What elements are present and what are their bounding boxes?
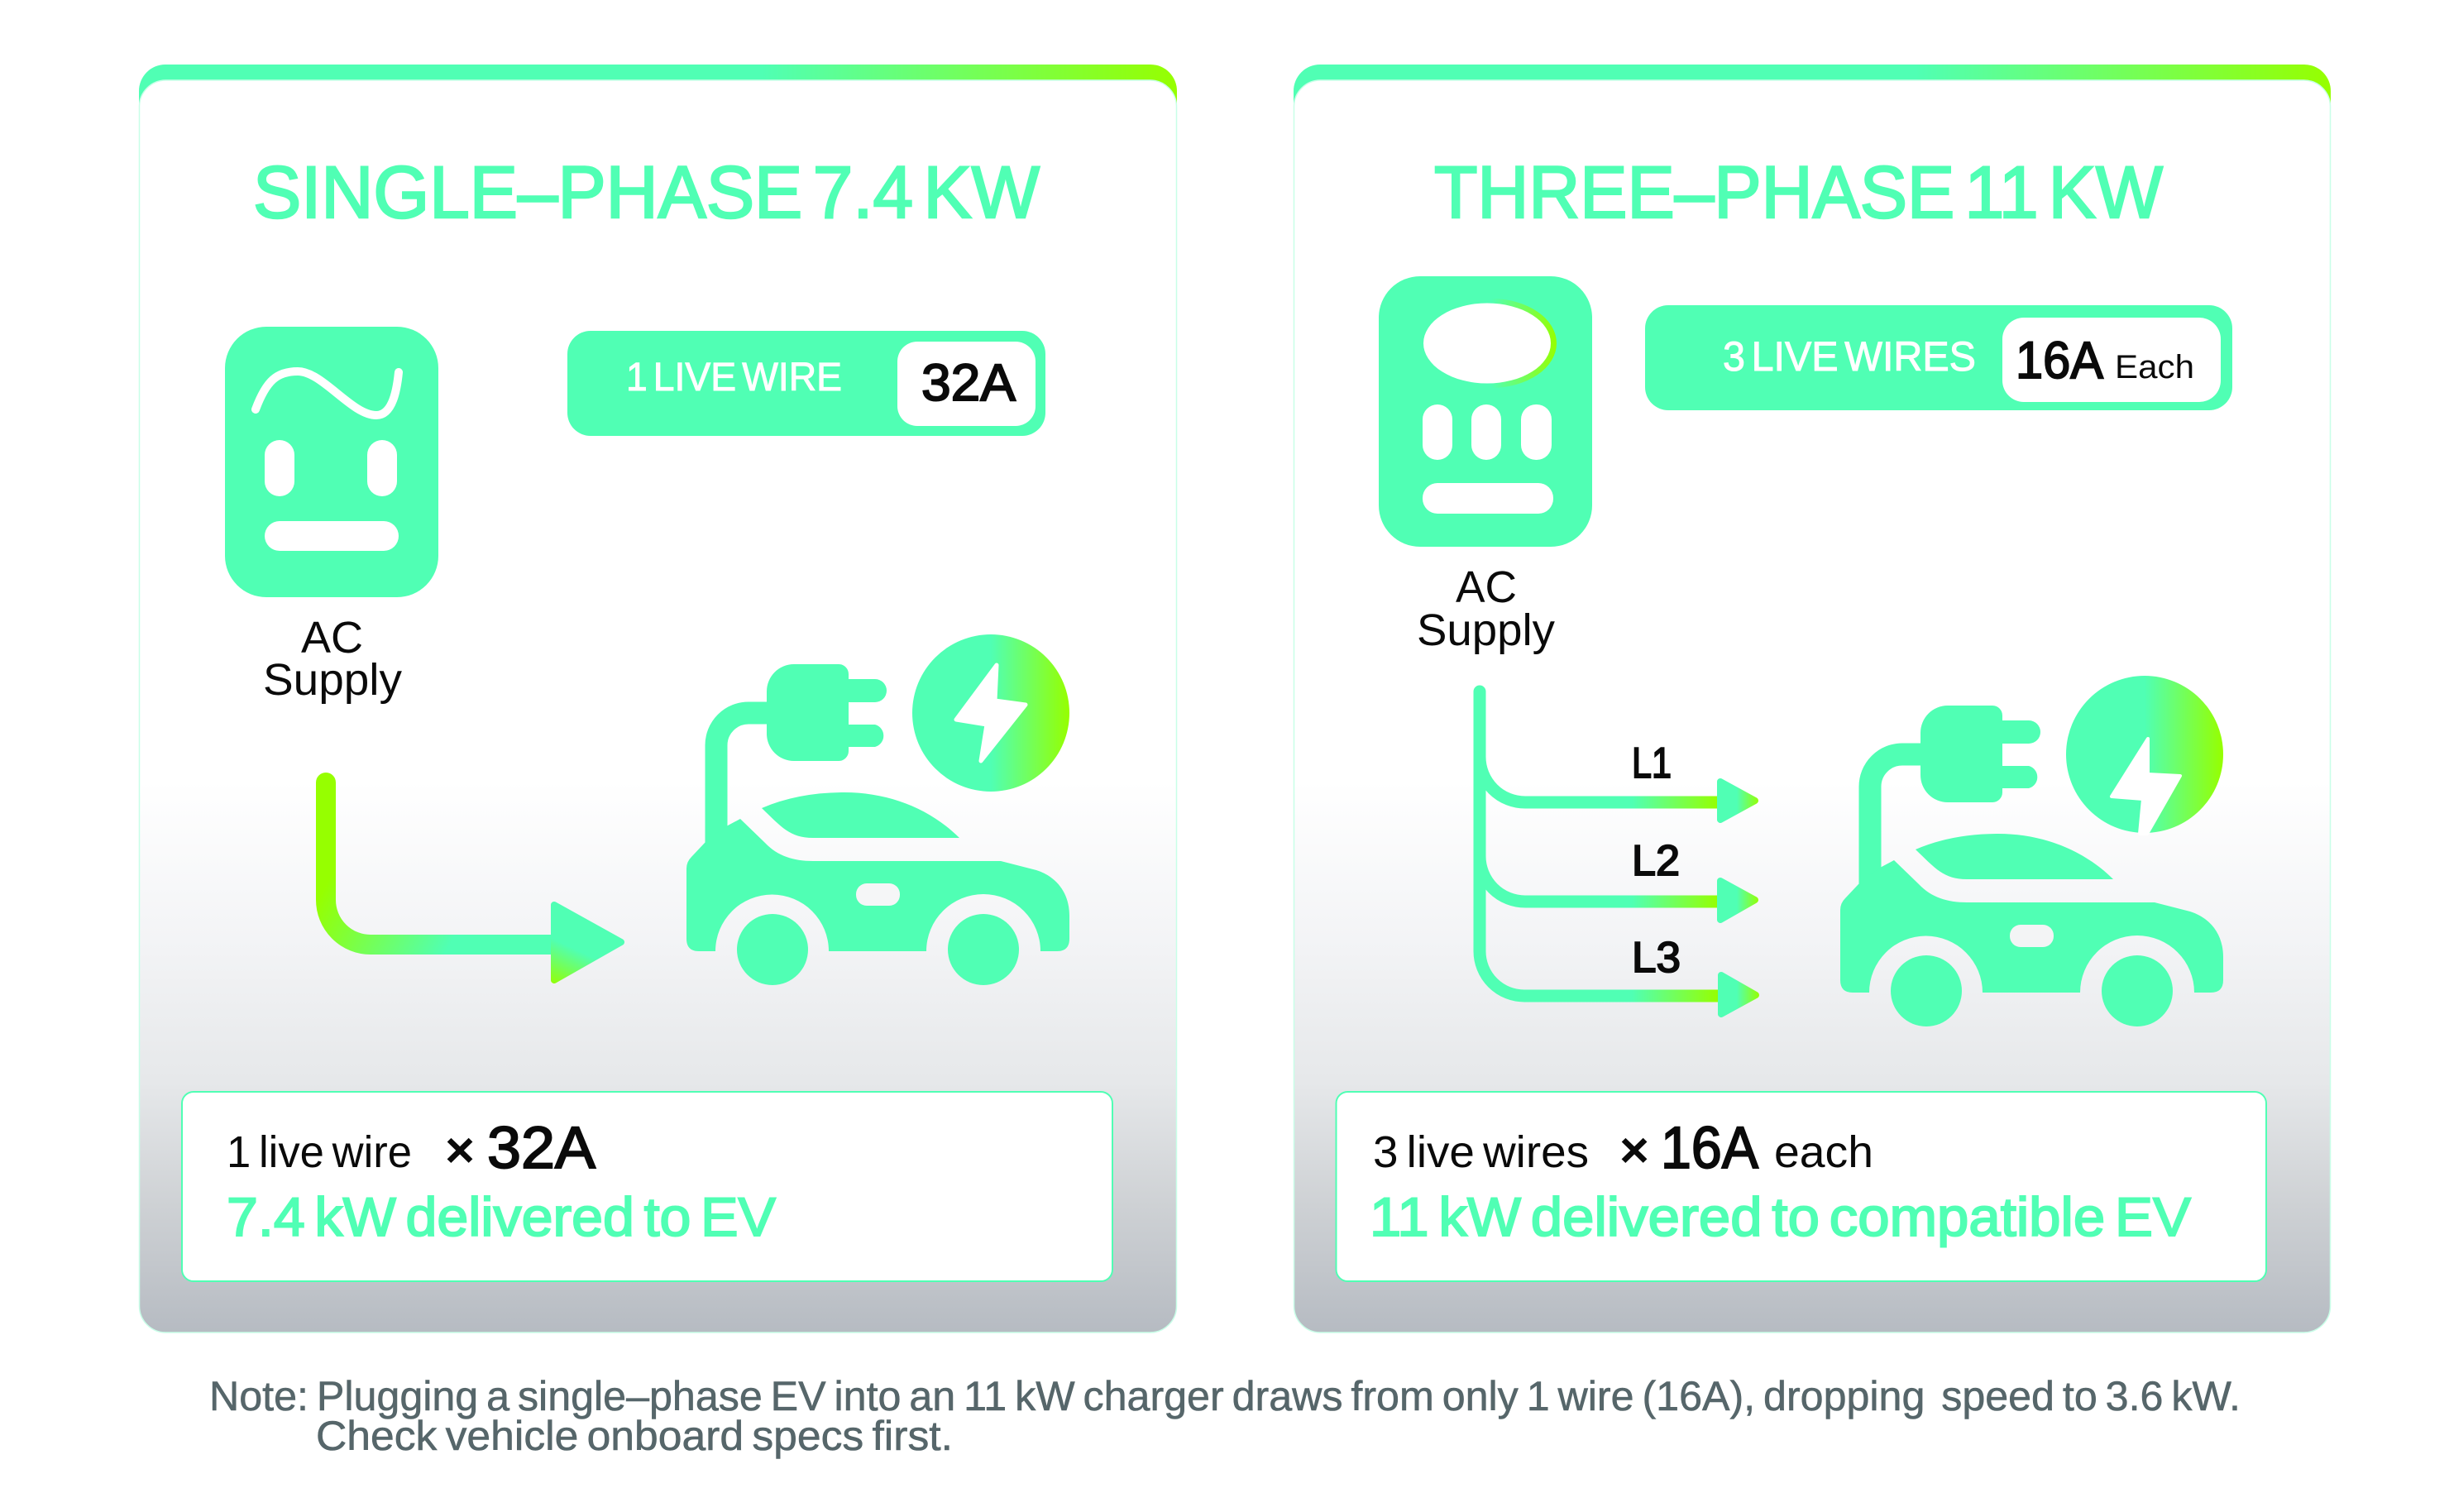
label: AC supply bbox=[1417, 562, 1555, 655]
summary box: single-phase: 1 live wire bbox=[227, 1127, 412, 1177]
summary box: three-phase: 11 kW delivered to compatible EV bbox=[1370, 1186, 2191, 1247]
heading: three-phase: THREE–PHASE 11 KW bbox=[1434, 151, 2163, 233]
diagram: L1 L2 L3 wires bbox=[1480, 691, 1756, 1014]
icon: EV with plug and charge badge bbox=[686, 634, 1069, 985]
summary box: single-phase: 32A bbox=[487, 1116, 596, 1181]
summary box: single-phase bbox=[182, 1092, 1112, 1281]
summary box: three-phase: × bbox=[1619, 1122, 1649, 1178]
pill: 3 live wires 16A each: 3 LIVE WIRES bbox=[1723, 333, 1976, 380]
diagram: L1 L2 L3 wires: L1 bbox=[1632, 739, 1672, 787]
panel background bbox=[139, 80, 1176, 1333]
footnote: Check vehicle onboard specs first. bbox=[316, 1413, 953, 1459]
pill: 3 live wires 16A each bbox=[1645, 305, 2232, 410]
pill: 3 live wires 16A each: 16A bbox=[2016, 332, 2103, 390]
panel background bbox=[1294, 80, 2331, 1333]
label: AC supply: Supply bbox=[263, 655, 402, 705]
icon: EV with plug and charge badge bbox=[1840, 676, 2223, 1026]
diagram: L1 L2 L3 wires: L3 bbox=[1632, 934, 1681, 982]
summary box: three-phase: 16A bbox=[1661, 1116, 1759, 1181]
summary box: three-phase: 3 live wires bbox=[1373, 1127, 1589, 1177]
label: AC supply bbox=[263, 613, 402, 705]
summary box: three-phase bbox=[1337, 1092, 2266, 1281]
label: AC supply: Supply bbox=[1417, 605, 1555, 655]
icon: single-phase socket bbox=[225, 327, 438, 597]
footnote: Note: Plugging a single–phase EV into an 11 kW charger draws from only 1 wire (16A), dropping speed to 3.6 kW. bbox=[209, 1373, 2241, 1419]
diagram: L1 L2 L3 wires: L2 bbox=[1632, 837, 1680, 885]
footnote bbox=[209, 1373, 2241, 1459]
summary box: three-phase: each bbox=[1774, 1127, 1873, 1177]
pill: 1 live wire 32A: 1 LIVE WIRE bbox=[626, 356, 842, 400]
label: AC supply: AC bbox=[1456, 562, 1517, 612]
icon: three-phase socket bbox=[1379, 276, 1592, 547]
summary box: single-phase: × bbox=[445, 1122, 475, 1178]
panel top accent band bbox=[1294, 65, 2331, 139]
summary box: single-phase: 7.4 kW delivered to EV bbox=[227, 1186, 776, 1247]
panel: three-phase bbox=[1294, 65, 2331, 1333]
panel: single-phase bbox=[139, 65, 1177, 1333]
heading: single-phase: SINGLE–PHASE 7.4 KW bbox=[253, 151, 1040, 233]
pill: 3 live wires 16A each: Each bbox=[2115, 349, 2194, 385]
pill: 1 live wire 32A bbox=[567, 331, 1045, 436]
label: AC supply: AC bbox=[301, 613, 363, 663]
panel top accent band bbox=[139, 65, 1177, 139]
pill: 1 live wire 32A: 32A bbox=[921, 354, 1016, 412]
arrow: supply to car bbox=[326, 782, 621, 980]
